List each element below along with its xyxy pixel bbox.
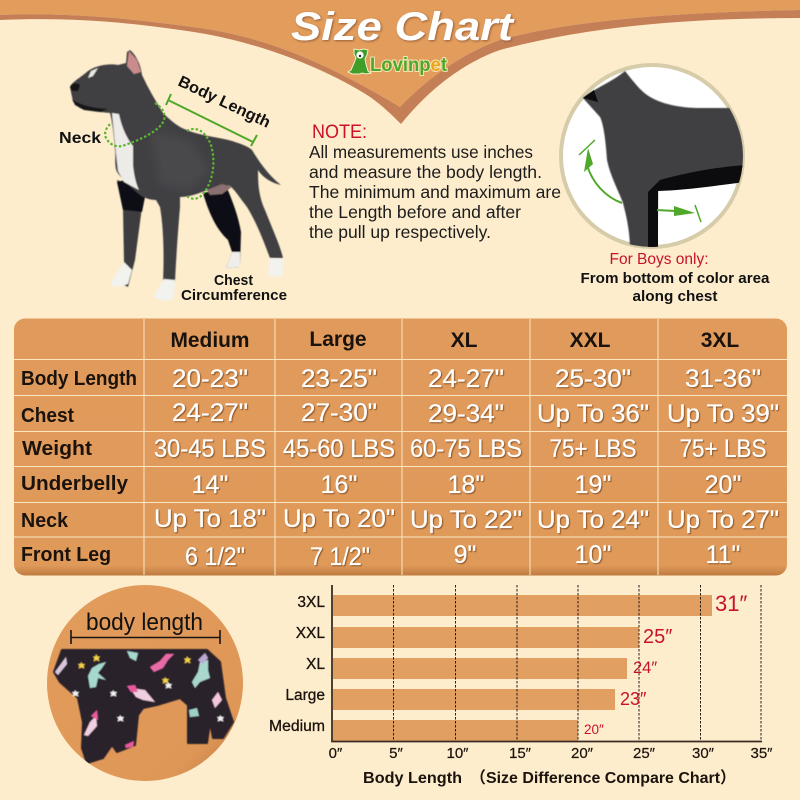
label: body length: body length <box>86 609 203 636</box>
body length measure <box>166 73 273 146</box>
table values: 11" <box>706 541 740 569</box>
logo: Lovinpet <box>348 49 448 76</box>
nose and mouth <box>70 83 108 112</box>
category labels <box>269 594 325 735</box>
table values: 7 1/2" <box>310 543 370 571</box>
note text: the pull up respectively. <box>309 222 491 242</box>
row labels: Neck <box>21 510 69 532</box>
value labels: 20″ <box>584 722 604 737</box>
chest measure ring <box>187 129 213 199</box>
axes <box>332 585 762 742</box>
dog torso close-up <box>583 71 745 250</box>
bracket <box>71 630 220 644</box>
inset circle: boys measurement <box>561 65 745 250</box>
label: chest circumference: Chest <box>214 272 253 289</box>
neck measure ring <box>105 103 164 146</box>
bars <box>333 595 712 741</box>
table values: 75+ LBS <box>550 435 636 463</box>
label: body length: Body Length <box>175 73 273 132</box>
table values: Up To 27" <box>667 506 779 534</box>
table values: 14" <box>192 471 228 499</box>
table values: 25-30" <box>555 365 631 393</box>
table values: 20" <box>705 471 741 499</box>
header banner <box>0 0 800 124</box>
axis title: Body Length <box>363 770 462 787</box>
table values: 45-60 LBS <box>283 435 395 463</box>
table values: 9" <box>454 541 476 569</box>
belly <box>207 184 232 195</box>
table values: Up To 39" <box>667 400 779 428</box>
size table <box>14 318 787 576</box>
icon: green dog <box>348 49 371 74</box>
table values: 6 1/2" <box>185 543 245 571</box>
category labels: XXL <box>296 625 325 642</box>
front paw <box>154 279 175 301</box>
white chest <box>112 113 139 190</box>
table values: 16" <box>321 471 357 499</box>
row labels: Front Leg <box>21 544 111 566</box>
column headers: Large <box>309 328 367 351</box>
axis tick labels: 15″ <box>509 745 532 762</box>
dog body <box>70 50 283 282</box>
table values: 29-34" <box>428 400 504 428</box>
inset caption: For Boys only: <box>610 251 708 268</box>
category labels: Large <box>285 687 325 704</box>
column headers: XXL <box>570 329 611 352</box>
value labels <box>584 591 747 737</box>
table values: 24-27" <box>172 399 248 427</box>
table background <box>14 318 787 576</box>
note text <box>309 142 561 242</box>
bar chart: body length compare <box>269 585 773 787</box>
table values: 31-36" <box>685 365 761 393</box>
axis tick labels: 0″ <box>329 745 343 762</box>
axis title: （Size Difference Compare Chart） <box>470 769 736 787</box>
axis tick labels: 20″ <box>571 745 594 762</box>
garment circle <box>47 585 243 781</box>
arrow: up along chest <box>579 140 622 203</box>
inset caption <box>580 251 770 305</box>
row labels: Chest <box>21 405 74 427</box>
table values: Up To 20" <box>283 505 395 533</box>
table values: 23-25" <box>301 365 377 393</box>
table values: Up To 36" <box>537 400 649 428</box>
note text: and measure the body length. <box>309 162 542 182</box>
value labels: 24″ <box>633 659 657 677</box>
value labels: 31″ <box>715 591 747 616</box>
table values: 30-45 LBS <box>154 435 266 463</box>
label: chest circumference <box>181 272 287 304</box>
note text: All measurements use inches <box>309 142 533 162</box>
table values: 18" <box>448 471 484 499</box>
body shading <box>150 130 210 190</box>
table values: 24-27" <box>428 365 504 393</box>
axis tick labels: 30″ <box>692 745 715 762</box>
inset caption: From bottom of color area <box>580 270 770 287</box>
garment: unicorn pajama <box>54 650 233 763</box>
column headers: 3XL <box>701 329 739 352</box>
table values: 60-75 LBS <box>410 435 522 463</box>
table values <box>154 365 779 571</box>
title: Size Chart <box>291 5 515 49</box>
note text: the Length before and after <box>309 202 521 222</box>
value labels: 25″ <box>643 626 672 648</box>
circle background <box>47 585 243 781</box>
note text: The minimum and maximum are <box>309 182 561 202</box>
column headers: Medium <box>170 329 250 352</box>
table values: 27-30" <box>301 399 377 427</box>
column headers <box>170 328 739 352</box>
table values: 20-23" <box>172 365 248 393</box>
row labels <box>21 368 137 566</box>
axis tick labels: 10″ <box>446 745 469 762</box>
far front leg <box>114 180 146 287</box>
category labels: 3XL <box>297 594 325 611</box>
row labels: Weight <box>22 438 92 460</box>
eye marking <box>88 68 98 78</box>
unicorn prints <box>88 662 106 688</box>
category labels: XL <box>306 656 325 673</box>
axis tick labels <box>329 745 773 762</box>
ear <box>127 51 141 74</box>
axis tick labels: 25″ <box>633 745 656 762</box>
label: chest circumference: Circumference <box>181 287 287 304</box>
axis title <box>363 769 736 787</box>
category labels: Medium <box>269 718 325 735</box>
note heading: NOTE: <box>312 121 367 143</box>
axis tick labels: 35″ <box>750 745 773 762</box>
far hind leg <box>203 188 241 268</box>
value labels: 23″ <box>620 689 647 709</box>
table values: 10" <box>575 541 611 569</box>
table values: Up To 22" <box>410 506 522 534</box>
note <box>309 121 561 242</box>
label: neck: Neck <box>59 130 101 147</box>
table values: Up To 24" <box>537 506 649 534</box>
brand name: Lovinpet <box>370 55 448 76</box>
dog illustration <box>70 50 284 301</box>
column headers: XL <box>451 329 478 352</box>
row labels: Body Length <box>21 368 137 390</box>
inset caption: along chest <box>632 288 718 305</box>
table values: Up To 18" <box>154 505 266 533</box>
table values: 75+ LBS <box>680 435 766 463</box>
hind paw <box>268 258 284 277</box>
axis tick labels: 5″ <box>389 745 404 762</box>
table values: 19" <box>575 471 611 499</box>
row labels: Underbelly <box>21 473 129 495</box>
arrow: bottom of color area <box>657 205 701 222</box>
